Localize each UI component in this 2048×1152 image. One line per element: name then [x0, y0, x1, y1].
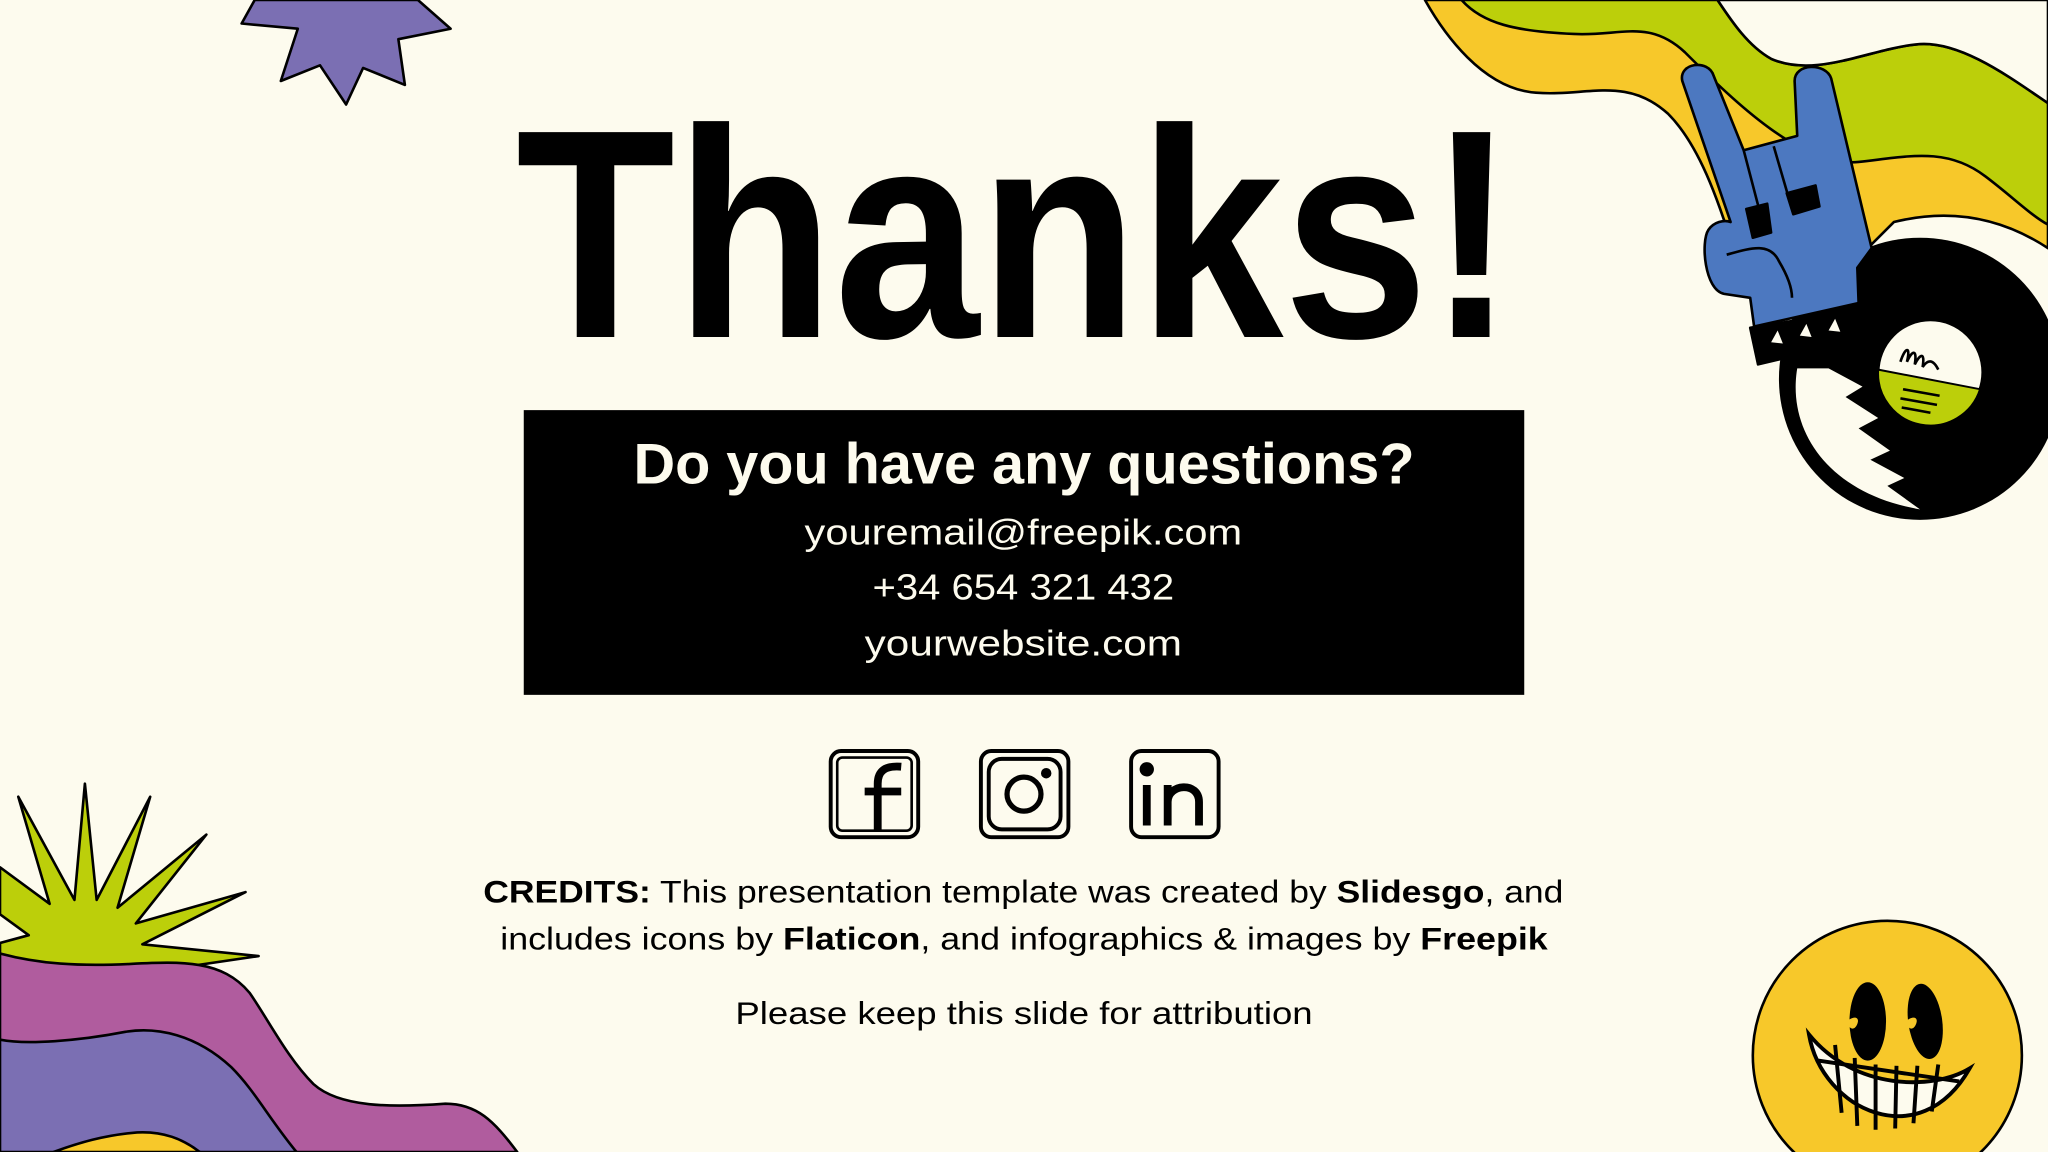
attribution note: Please keep this slide for attribution: [735, 996, 1313, 1031]
contact details: yourwebsite.com: [865, 623, 1182, 664]
icon: smiley face: [1753, 921, 2022, 1152]
contact details: youremail@freepik.com: [805, 512, 1242, 553]
credits text: includes icons by Flaticon , and infographics & images by Freepik: [500, 922, 1548, 957]
social icons: [831, 751, 1219, 837]
icon: facebook: [831, 751, 918, 837]
decoration: bottom-left waves and green burst: [0, 784, 517, 1152]
icon: rock hand: [1682, 65, 1872, 364]
icon: instagram: [981, 751, 1068, 837]
icon: linkedin: [1131, 751, 1219, 837]
contact details: +34 654 321 432: [872, 567, 1174, 608]
title: Thanks!: [516, 68, 1515, 401]
contact box: [524, 410, 1524, 695]
question heading: Do you have any questions?: [633, 432, 1415, 496]
contact details: [805, 512, 1242, 664]
credits text: CREDITS: This presentation template was created by Slidesgo , and: [483, 875, 1563, 910]
decoration: top-right waves: [1425, 0, 2048, 261]
icon: vinyl record: [1779, 238, 2048, 520]
icon: purple star: [242, 0, 451, 104]
credits text: [483, 875, 1563, 1031]
